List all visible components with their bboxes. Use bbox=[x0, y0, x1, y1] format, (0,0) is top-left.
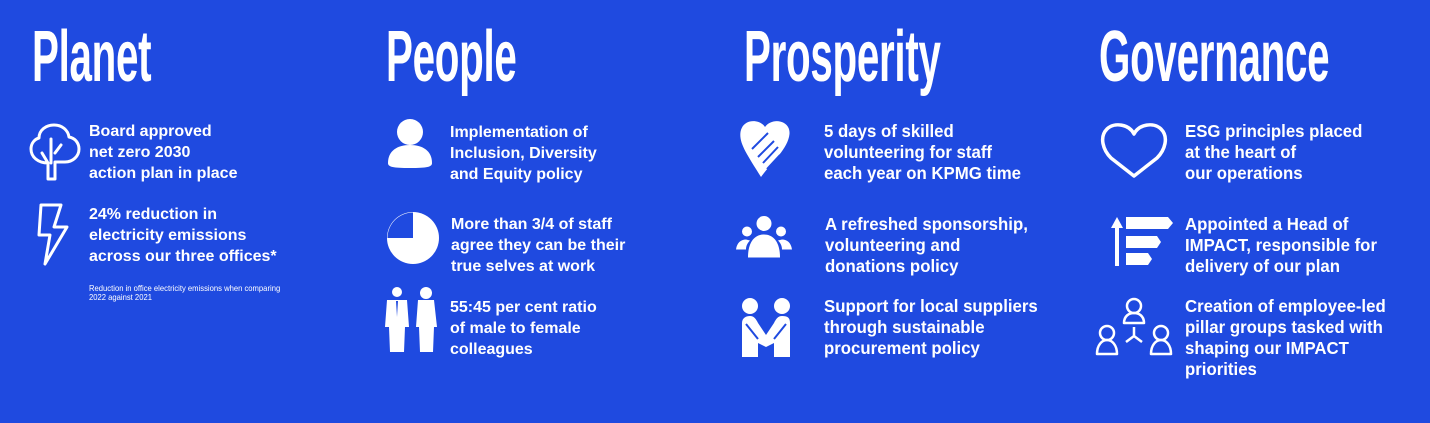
text: suppliers bbox=[824, 296, 1038, 358]
icon: person bbox=[388, 119, 432, 168]
footnote bbox=[89, 283, 280, 302]
text: electricity bbox=[89, 206, 277, 265]
text: true selves: More than 3/4 of staff bbox=[451, 216, 612, 233]
title: Prosperity: Prosperity bbox=[744, 17, 941, 97]
footnote: Reduction in office electricity emissions when comparing bbox=[89, 283, 280, 293]
text: sponsorship bbox=[825, 214, 1028, 276]
icon: people network bbox=[1096, 298, 1172, 356]
text: net zero: action plan in place bbox=[89, 165, 237, 182]
text: pillar groups: shaping our IMPACT bbox=[1185, 338, 1349, 358]
text: sponsorship: donations policy bbox=[825, 256, 958, 276]
text: suppliers: Support for local suppliers bbox=[824, 296, 1038, 316]
title: Planet: Planet bbox=[32, 17, 151, 97]
text: volunteering days bbox=[824, 121, 1021, 183]
text: volunteering days: each year on KPMG time bbox=[824, 163, 1021, 183]
icon: male and female bbox=[385, 287, 437, 352]
text: electricity: 24% reduction in bbox=[89, 206, 217, 223]
text: inclusion bbox=[450, 124, 597, 183]
text: inclusion: Inclusion, Diversity bbox=[450, 145, 597, 162]
text: net zero bbox=[89, 123, 237, 182]
text: suppliers: procurement policy bbox=[824, 338, 980, 358]
icon: arrow and flags bbox=[1111, 217, 1173, 266]
title: People: People bbox=[386, 17, 517, 97]
text: sponsorship: A refreshed sponsorship, bbox=[825, 214, 1028, 234]
text: volunteering days: volunteering for staff bbox=[824, 142, 992, 162]
text: pillar groups: Creation of employee-led bbox=[1185, 296, 1386, 316]
text: ratio bbox=[450, 299, 597, 358]
icon: handshake bbox=[742, 298, 790, 357]
text: true selves: true selves at work bbox=[451, 258, 595, 275]
text: net zero: net zero 2030 bbox=[89, 144, 190, 161]
text: ESG principles: our operations bbox=[1185, 163, 1303, 183]
text: ratio: 55:45 per cent ratio bbox=[450, 299, 597, 316]
text: head of impact bbox=[1185, 214, 1377, 276]
icon: tree bbox=[30, 124, 80, 180]
icon: heart hand bbox=[740, 121, 790, 177]
text: pillar groups: pillar groups tasked with bbox=[1185, 317, 1383, 337]
text: electricity: across our three offices* bbox=[89, 248, 277, 265]
footnote: 2022 against 2021 bbox=[89, 292, 152, 302]
text: electricity: electricity emissions bbox=[89, 227, 246, 244]
text: ratio: of male to female bbox=[450, 320, 581, 337]
text: pillar groups: priorities bbox=[1185, 359, 1257, 379]
text: sponsorship: volunteering and bbox=[825, 235, 960, 255]
text: head of impact: IMPACT, responsible for bbox=[1185, 235, 1377, 255]
text: head of impact: Appointed a Head of bbox=[1185, 214, 1348, 234]
text: ratio: colleagues bbox=[450, 341, 533, 358]
icon: lightning bolt bbox=[38, 204, 68, 266]
icon: heart outline bbox=[1100, 123, 1168, 178]
text: pillar groups bbox=[1185, 296, 1386, 379]
text: head of impact: delivery of our plan bbox=[1185, 256, 1340, 276]
text: ESG principles: at the heart of bbox=[1185, 142, 1296, 162]
text: inclusion: Implementation of bbox=[450, 124, 588, 141]
title: Governance: Governance bbox=[1099, 17, 1329, 97]
text: true selves: agree they can be their bbox=[451, 237, 625, 254]
text: ESG principles bbox=[1185, 121, 1362, 183]
text: true selves bbox=[451, 216, 626, 275]
text: ESG principles: ESG principles placed bbox=[1185, 121, 1362, 141]
icon: pie chart bbox=[387, 212, 439, 264]
text: net zero: Board approved bbox=[89, 123, 212, 140]
text: volunteering days: 5 days of skilled bbox=[824, 121, 954, 141]
text: suppliers: through sustainable bbox=[824, 317, 985, 337]
text: inclusion: and Equity policy bbox=[450, 166, 582, 183]
icon: group bbox=[736, 216, 792, 258]
